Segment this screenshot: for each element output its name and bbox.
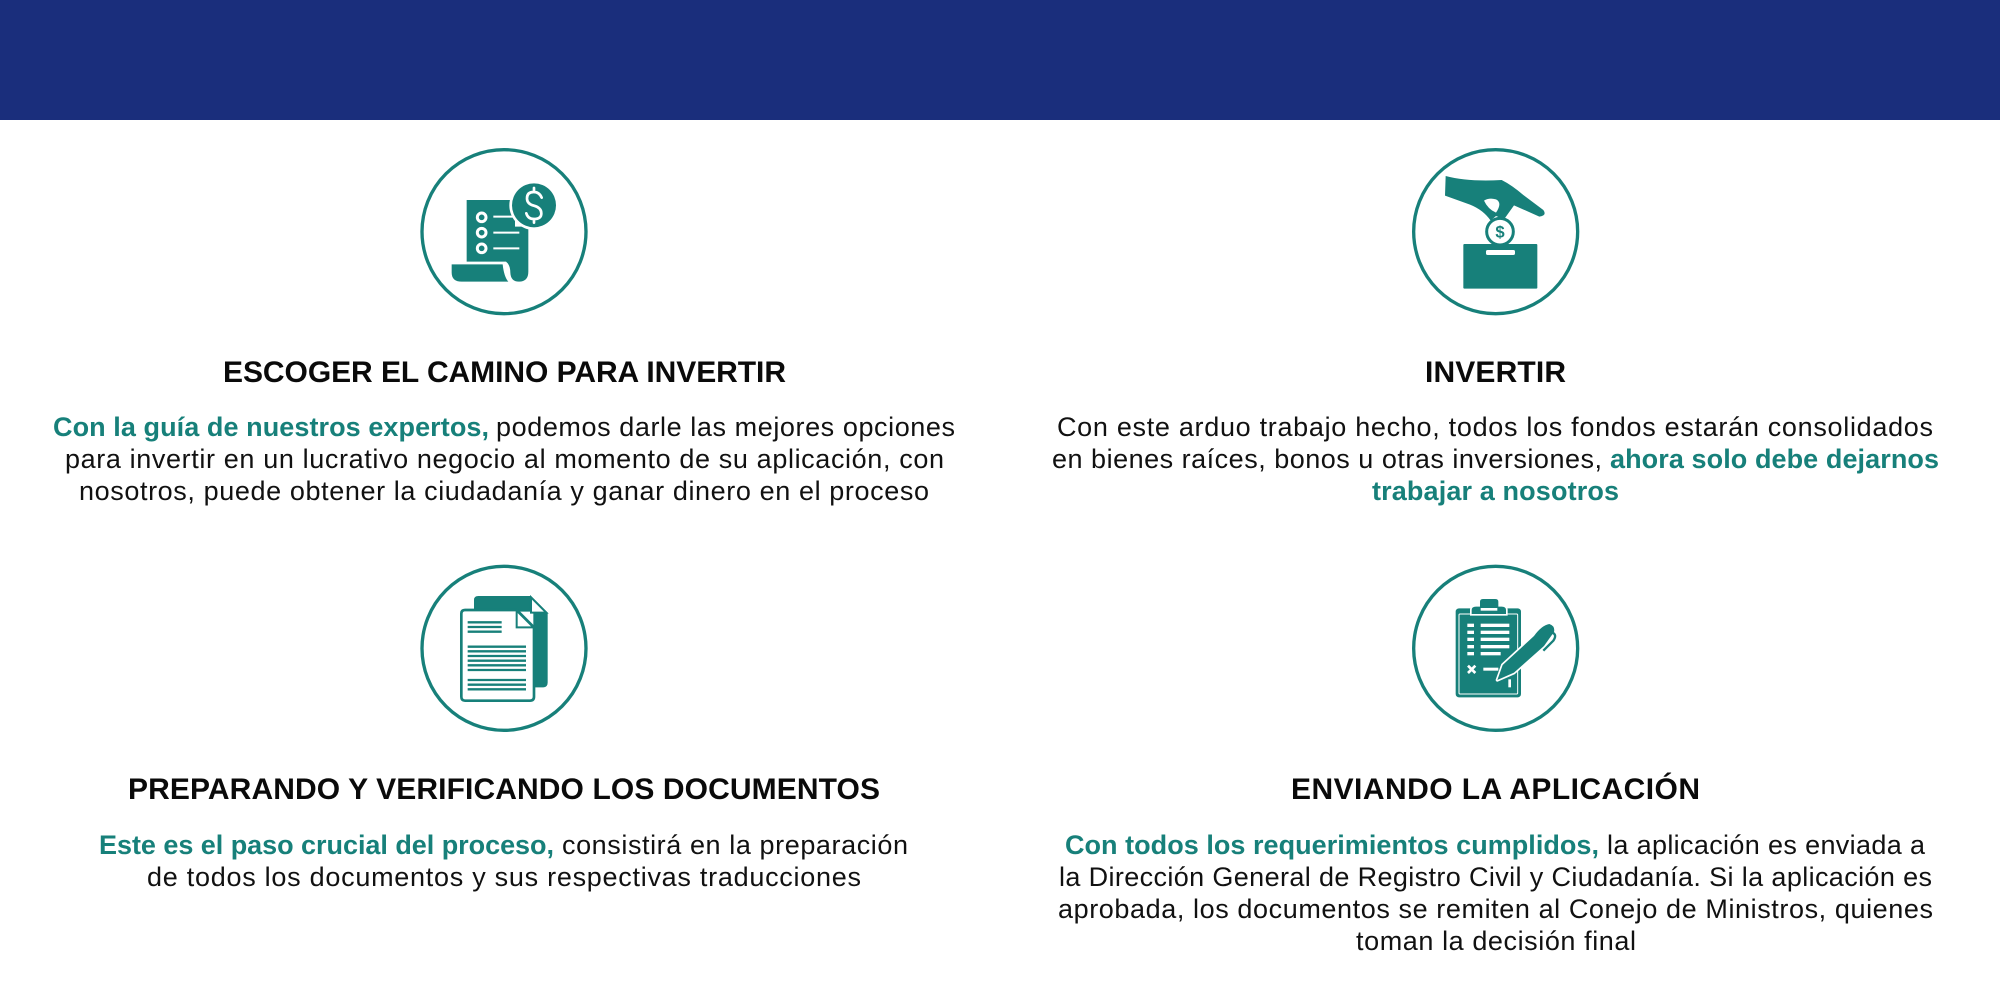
icon: clipboard and pen: [1414, 566, 1578, 730]
body text: para invertir en un lucrativo negocio al momento de su aplicación, con: [65, 444, 944, 474]
body text: la aplicación es enviada a: [1607, 830, 1926, 860]
heading: INVERTIR: [1425, 356, 1566, 389]
heading: ESCOGER EL CAMINO PARA INVERTIR: [223, 356, 786, 389]
body text: consistirá en la preparación: [562, 830, 908, 860]
body text: trabajar a nosotros: [1372, 476, 1619, 506]
body text: aprobada, los documentos se remiten al Conejo de Ministros, quienes: [1058, 894, 1933, 924]
panel: invertir: [1052, 150, 1939, 506]
body text: Con este arduo trabajo hecho, todos los fondos estarán consolidados: [1057, 412, 1933, 442]
icon: hand dropping coin in box: $: [1495, 223, 1505, 242]
panel: enviando la aplicacion: [1058, 566, 1933, 956]
body text: ahora solo debe dejarnos: [1610, 444, 1939, 474]
panel: escoger el camino: [53, 150, 955, 506]
icon: document with dollar coin: [422, 150, 586, 314]
body text: [99, 830, 908, 892]
body text: [1052, 412, 1939, 506]
heading: PREPARANDO Y VERIFICANDO LOS DOCUMENTOS: [128, 773, 880, 806]
panel: preparando documentos: [99, 566, 908, 892]
body text: toman la decisión final: [1356, 926, 1636, 956]
body text: Con la guía de nuestros expertos,: [53, 412, 489, 442]
icon: stacked documents: [422, 566, 586, 730]
body text: [1058, 830, 1933, 956]
icon: hand dropping coin in box: [1414, 150, 1578, 314]
body text: de todos los documentos y sus respectivas traducciones: [147, 862, 861, 892]
body text: nosotros, puede obtener la ciudadanía y ganar dinero en el proceso: [79, 476, 929, 506]
body text: [53, 412, 955, 506]
body text: Con todos los requerimientos cumplidos,: [1065, 830, 1599, 860]
body text: en bienes raíces, bonos u otras inversiones,: [1052, 444, 1602, 474]
body text: podemos darle las mejores opciones: [496, 412, 955, 442]
body text: Este es el paso crucial del proceso,: [99, 830, 554, 860]
body text: la Dirección General de Registro Civil y Ciudadanía. Si la aplicación es: [1059, 862, 1932, 892]
heading: ENVIANDO LA APLICACIÓN: [1291, 772, 1700, 806]
header band: [0, 0, 2000, 120]
